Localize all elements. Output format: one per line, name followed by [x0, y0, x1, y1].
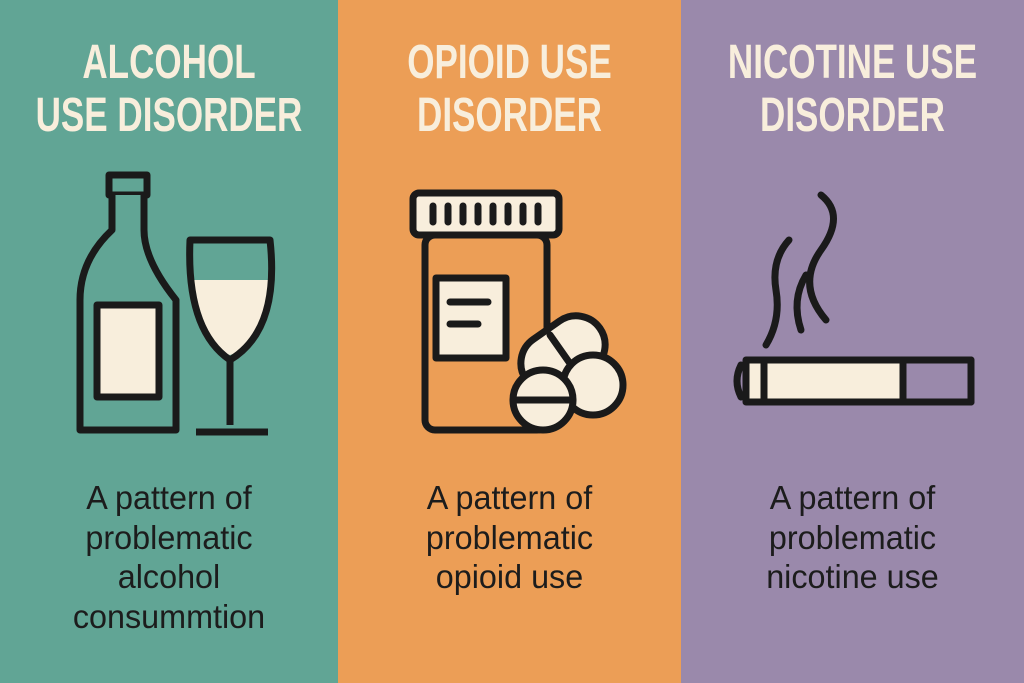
heading: nicotine: NICOTINE USE — [728, 36, 977, 89]
heading: opioid: OPIOID USE — [407, 36, 612, 89]
panel: nicotine — [681, 0, 1024, 683]
panel: alcohol — [0, 0, 338, 683]
heading: alcohol: ALCOHOL — [82, 36, 256, 89]
description: alcohol: alcohol — [118, 558, 220, 595]
description: opioid: problematic — [426, 518, 593, 556]
description: alcohol: problematic — [85, 518, 253, 556]
heading: nicotine: DISORDER — [760, 89, 945, 142]
heading: opioid: DISORDER — [417, 89, 602, 142]
heading: opioid — [407, 36, 612, 142]
heading: nicotine — [728, 36, 977, 142]
description: opioid: opioid use — [436, 558, 583, 595]
description: opioid — [426, 479, 593, 595]
icon: cigarette with smoke — [734, 192, 974, 406]
heading: alcohol: USE DISORDER — [36, 89, 302, 142]
description: alcohol — [73, 479, 265, 634]
description: nicotine — [766, 479, 939, 595]
description: nicotine: nicotine use — [766, 558, 939, 595]
description: alcohol: consummtion — [73, 598, 265, 634]
description: nicotine: A pattern of — [770, 479, 935, 516]
description: alcohol: A pattern of — [86, 479, 252, 516]
panel: opioid — [338, 0, 681, 683]
icon: pill bottle and pills — [410, 190, 626, 434]
description: opioid: A pattern of — [427, 479, 592, 516]
description: nicotine: problematic — [769, 518, 936, 556]
heading: alcohol — [36, 36, 302, 142]
icon: bottle and glass — [76, 172, 276, 436]
